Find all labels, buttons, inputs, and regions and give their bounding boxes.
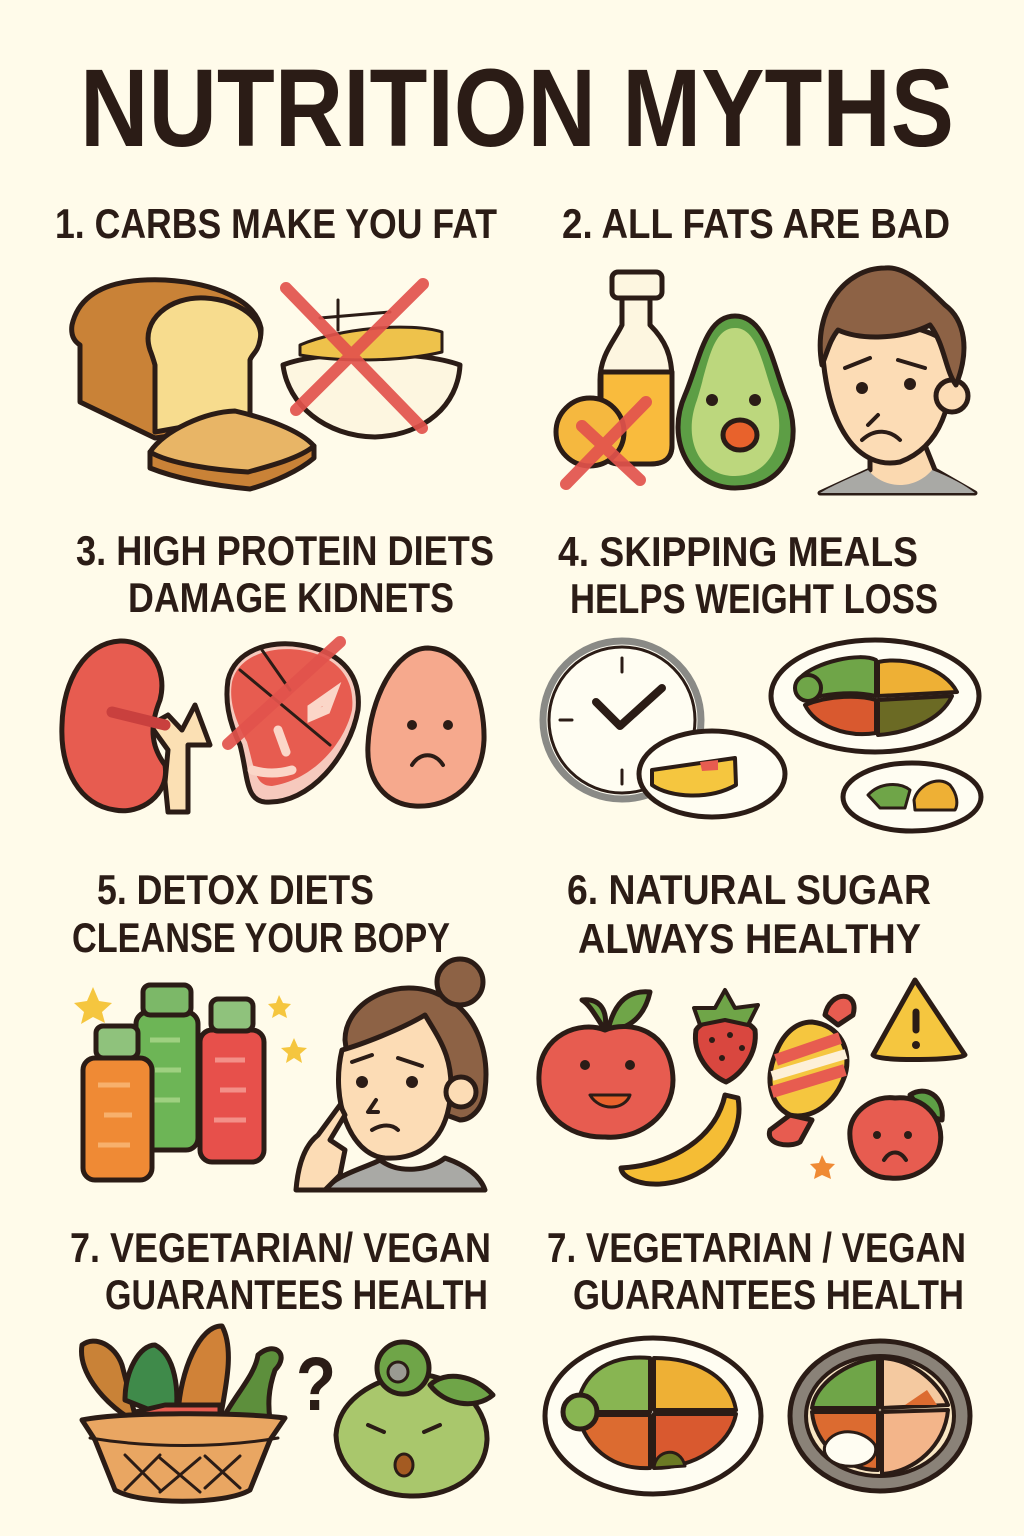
icon: clock [543,641,701,799]
heading: myth 4: 4. SKIPPING MEALS [558,528,918,575]
icon: crossed-out bowl [283,284,460,437]
icon: thinking woman [296,959,486,1190]
icon: sad apple [850,1091,942,1178]
heading: myth 1: 1. CARBS MAKE YOU FAT [55,200,497,247]
heading: myth 6 line 2: ALWAYS HEALTHY [578,915,921,962]
panel: myth 6 [539,866,965,1184]
panel: myth 5 [72,866,486,1190]
icon: kidney [62,641,210,812]
panel: myth 3 [62,527,494,812]
icon: sparkles [74,987,307,1063]
panel: myth 7 [70,1224,493,1501]
heading: myth 7: 7. VEGETARIAN/ VEGAN [70,1224,491,1271]
icon: strawberry [694,990,758,1082]
icon: crossed-out orange [556,398,646,484]
icon: small star [810,1155,835,1179]
panel: myth 4 [543,528,981,831]
icon: smiling apple [539,992,673,1137]
icon: crossed-out meat [227,642,358,802]
icon: bread loaf [72,280,261,438]
heading: myth 4 line 2: HELPS WEIGHT LOSS [570,575,938,622]
icon: small meal plate [843,763,981,831]
heading: myth 3 line 2: DAMAGE KIDNETS [128,574,454,621]
heading: myth 6: 6. NATURAL SUGAR [567,866,931,913]
heading: myth 7 line 2: GUARANTEES HEALTH [105,1271,488,1318]
panel: myth 2 [556,200,975,493]
icon: worried man [820,268,975,493]
heading: myth 5 line 2: CLEANSE YOUR BOPY [72,914,450,961]
icon: warning triangle [873,980,965,1060]
heading: myth 2: 2. ALL FATS ARE BAD [562,200,950,247]
heading: myth 5: 5. DETOX DIETS [97,866,374,913]
icon: large vegetable plate [545,1338,761,1494]
icon: large meal plate [771,640,979,752]
icon: orange juice bottle [83,1026,152,1180]
icon: dark divided plate [790,1341,970,1491]
heading: myth 3: 3. HIGH PROTEIN DIETS [76,527,494,574]
icon: bread slice [150,411,314,489]
icon: green fruit [336,1342,493,1496]
icon: small egg plate [639,731,785,817]
icon: vegetable basket [82,1326,285,1501]
icon: sad bean [368,648,484,806]
icon: green juice bottle [136,985,198,1150]
icon: candy [769,996,854,1145]
icon: red juice bottle [200,999,264,1162]
icon: oil bottle [600,272,672,464]
panel: myth 8 [545,1224,970,1494]
question mark: ? [296,1342,336,1427]
icon: banana [621,1095,739,1184]
icon: avocado [678,316,793,488]
panel: myth 1 [55,200,497,489]
